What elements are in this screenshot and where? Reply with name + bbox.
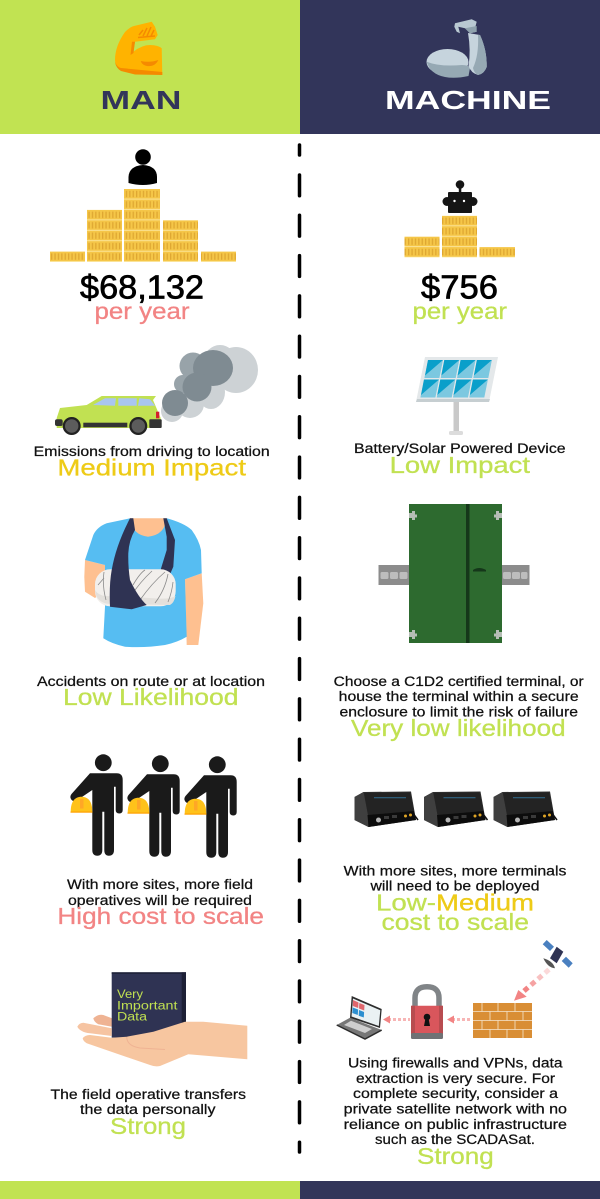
header panel: machine xyxy=(300,0,600,134)
book label: Important xyxy=(117,1000,179,1012)
impact text: man xyxy=(34,444,270,480)
security text: man: the data personally xyxy=(80,1102,216,1117)
cost: machine: per year xyxy=(412,298,507,324)
icon: hand holding data book xyxy=(77,972,247,1066)
cost: machine: $756 xyxy=(421,268,498,306)
icon: three terminals xyxy=(354,792,557,827)
arrow: satellite to firewall xyxy=(514,970,549,1001)
security text: machine: such as the SCADASat. xyxy=(375,1132,535,1147)
scale text: machine: With more sites, more terminals xyxy=(344,864,567,878)
book label: Data xyxy=(117,1012,148,1024)
security text: machine: private satellite network with no xyxy=(344,1102,567,1116)
cost: machine xyxy=(412,268,507,324)
scale text: man: With more sites, more field xyxy=(67,877,253,892)
impact text: man: Medium Impact xyxy=(57,454,247,480)
icon: robot xyxy=(442,180,478,213)
security text: machine xyxy=(344,1056,567,1169)
security text: man: Strong xyxy=(110,1113,186,1139)
scale text: man xyxy=(57,877,264,929)
scale text: machine: Low- xyxy=(376,890,436,916)
risk text: machine: house the terminal within a secure xyxy=(339,689,579,704)
book label: Very xyxy=(117,989,143,1001)
icon: three field workers with hard hats xyxy=(70,754,237,858)
icon: injured man with sling xyxy=(84,518,203,647)
impact text: machine: Low Impact xyxy=(390,452,531,478)
scale text: machine: will need to be deployed xyxy=(369,878,540,894)
impact text: machine xyxy=(354,441,566,478)
arrow: firewall to padlock xyxy=(447,1016,471,1024)
chart: machine coin stacks xyxy=(404,216,515,258)
risk text: man xyxy=(37,674,265,710)
footer bar xyxy=(0,1181,600,1199)
cost: man: per year xyxy=(94,298,190,324)
security text: machine: reliance on public infrastructure xyxy=(344,1117,567,1132)
chart: man coin stacks xyxy=(50,189,236,262)
icon: person xyxy=(128,149,157,185)
risk text: machine: enclosure to limit the risk of failure xyxy=(340,704,578,720)
scale text: man: High cost to scale xyxy=(57,903,264,929)
risk text: man: Accidents on route or at location xyxy=(37,674,265,689)
risk text: machine: Choose a C1D2 certified terminal, or xyxy=(334,674,584,689)
icon: smoke cloud xyxy=(161,345,258,422)
icon: robot arm xyxy=(426,19,487,78)
impact text: man: Emissions from driving to location xyxy=(34,444,270,459)
security text: machine: complete security, consider a xyxy=(353,1086,559,1101)
cost: man: $68,132 xyxy=(80,268,204,306)
security text: machine: Using firewalls and VPNs, data xyxy=(348,1056,563,1070)
scale text: man: operatives will be required xyxy=(68,893,252,908)
scale text: machine: cost to scale xyxy=(382,909,529,935)
icon: solar panel xyxy=(416,357,498,435)
scale text: machine xyxy=(344,864,567,935)
icon: flexed biceps xyxy=(115,22,162,75)
icon: green enclosure on din rail xyxy=(378,504,530,643)
arrow: padlock to laptop xyxy=(383,1016,410,1024)
icon: laptop xyxy=(337,996,382,1039)
security text: man xyxy=(50,1087,246,1139)
risk text: machine xyxy=(334,674,584,741)
header panel: man xyxy=(0,0,300,134)
security text: machine: Strong xyxy=(417,1143,494,1169)
scale text: machine: Medium xyxy=(436,890,534,916)
risk text: machine: Very low likelihood xyxy=(351,715,566,741)
heading: machine: MACHINE xyxy=(385,85,551,115)
impact text: machine: Battery/Solar Powered Device xyxy=(354,441,566,456)
heading: man: MAN xyxy=(100,85,182,115)
icon: car xyxy=(55,396,162,435)
risk text: man: Low Likelihood xyxy=(63,684,238,710)
book label xyxy=(117,989,179,1024)
cost: man xyxy=(80,268,204,324)
security text: machine: extraction is very secure. For xyxy=(356,1071,556,1086)
icon: satellite xyxy=(543,940,573,968)
icon: firewall xyxy=(473,1003,532,1038)
icon: padlock xyxy=(411,987,443,1039)
security text: man: The field operative transfers xyxy=(50,1087,246,1102)
